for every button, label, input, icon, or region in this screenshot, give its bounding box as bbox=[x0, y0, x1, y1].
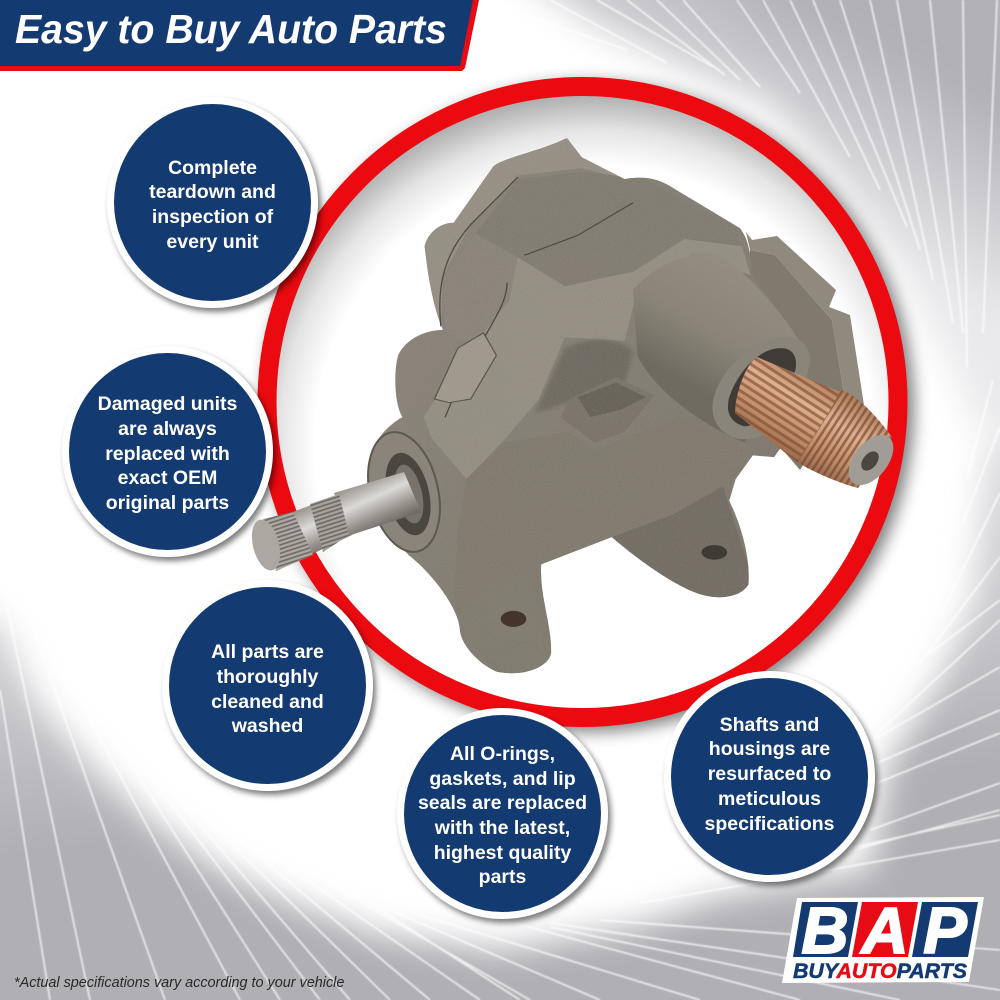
logo A tile bbox=[852, 902, 918, 957]
bubble: damaged units: Damaged units bbox=[98, 393, 237, 415]
end spline teeth bbox=[263, 512, 313, 571]
logo wordmark: BUYAUTOPARTS bbox=[793, 960, 967, 983]
middle spline teeth bbox=[310, 494, 349, 552]
casting ridge highlight bbox=[424, 239, 751, 479]
left bearing bbox=[357, 425, 451, 559]
bubble: shafts: Shafts and bbox=[720, 714, 819, 736]
bubble: shafts: resurfaced to bbox=[708, 763, 831, 785]
bubble: damaged units: original parts bbox=[106, 492, 229, 514]
bubble: cleaned bbox=[162, 580, 373, 791]
bubble: o-rings: highest quality bbox=[434, 842, 571, 864]
collar seal bbox=[728, 348, 796, 426]
lower box bbox=[458, 455, 753, 674]
bubble: o-rings: parts bbox=[479, 866, 526, 888]
casting cracks bbox=[440, 177, 633, 417]
housing shading bbox=[383, 138, 778, 674]
bubble: shafts: specifications bbox=[704, 813, 835, 835]
bubble: teardown: Complete bbox=[168, 157, 257, 179]
bubble: damaged units: replaced with bbox=[105, 443, 230, 465]
bearing seal bbox=[390, 462, 428, 526]
casting grain bbox=[383, 146, 778, 672]
spline teeth bbox=[735, 357, 841, 462]
left shaft bbox=[334, 472, 421, 535]
threads bbox=[797, 390, 892, 488]
left foot hole bbox=[501, 611, 526, 627]
bubble: o-rings: with the latest, bbox=[435, 817, 570, 839]
copper threaded tip bbox=[797, 390, 892, 488]
top face bbox=[609, 175, 635, 180]
logo letters: B bbox=[802, 894, 848, 967]
recess shadow bbox=[535, 340, 633, 414]
rear flange rim bbox=[746, 232, 864, 405]
bubble: cleaned: thoroughly bbox=[217, 666, 318, 688]
shaft neck bbox=[293, 494, 352, 555]
copper spline bbox=[735, 357, 841, 462]
bubble: o-rings: gaskets, and lip bbox=[429, 768, 576, 790]
right foot bbox=[612, 486, 748, 601]
right collar bbox=[712, 337, 810, 439]
shaft end cap bbox=[247, 517, 285, 573]
end spline bbox=[263, 512, 313, 571]
top flange bbox=[425, 138, 625, 328]
bubble: teardown: teardown and bbox=[149, 181, 276, 203]
product: steering gear box bbox=[252, 138, 894, 674]
title text: Easy to Buy Auto Parts bbox=[15, 6, 447, 52]
bubble: damaged units: exact OEM bbox=[118, 467, 217, 489]
bubble: cleaned: All parts are bbox=[211, 641, 324, 663]
title banner bbox=[0, 0, 479, 71]
shaft end socket bbox=[858, 448, 882, 474]
left face bbox=[445, 234, 518, 344]
shaft end face bbox=[840, 427, 902, 493]
logo letters: P bbox=[923, 894, 967, 967]
bubble: teardown bbox=[107, 97, 318, 308]
bubble: shafts bbox=[664, 671, 875, 882]
bubble: shafts: housings are bbox=[709, 738, 830, 760]
logo letters: A bbox=[860, 894, 908, 967]
bubble: o-rings: All O-rings, bbox=[450, 743, 555, 765]
bubble: o-rings bbox=[397, 708, 608, 919]
housing bbox=[371, 138, 800, 673]
output boss bbox=[633, 254, 808, 443]
bubble: damaged units bbox=[62, 346, 273, 557]
left foot bbox=[462, 638, 550, 674]
logo letters bbox=[802, 894, 967, 967]
rear flange body bbox=[740, 250, 845, 470]
lug bbox=[560, 377, 654, 443]
raised patch bbox=[434, 333, 496, 403]
right foot hole bbox=[701, 545, 727, 560]
logo P tile bbox=[912, 902, 978, 957]
logo B tile bbox=[793, 902, 858, 957]
middle spline bbox=[310, 494, 349, 552]
bubble: teardown: every unit bbox=[166, 231, 259, 253]
bubble: shafts: meticulous bbox=[718, 788, 821, 810]
lug recess bbox=[578, 383, 646, 417]
bubble: damaged units: are always bbox=[118, 418, 217, 440]
bubble: cleaned: cleaned and bbox=[211, 690, 324, 712]
bubble: teardown: inspection of bbox=[152, 206, 273, 228]
bubble: o-rings: seals are replaced bbox=[418, 792, 587, 814]
footnote: *Actual specifications vary according to your vehicle bbox=[14, 975, 344, 991]
bubble: cleaned: washed bbox=[232, 715, 303, 737]
bearing race bbox=[378, 448, 438, 540]
